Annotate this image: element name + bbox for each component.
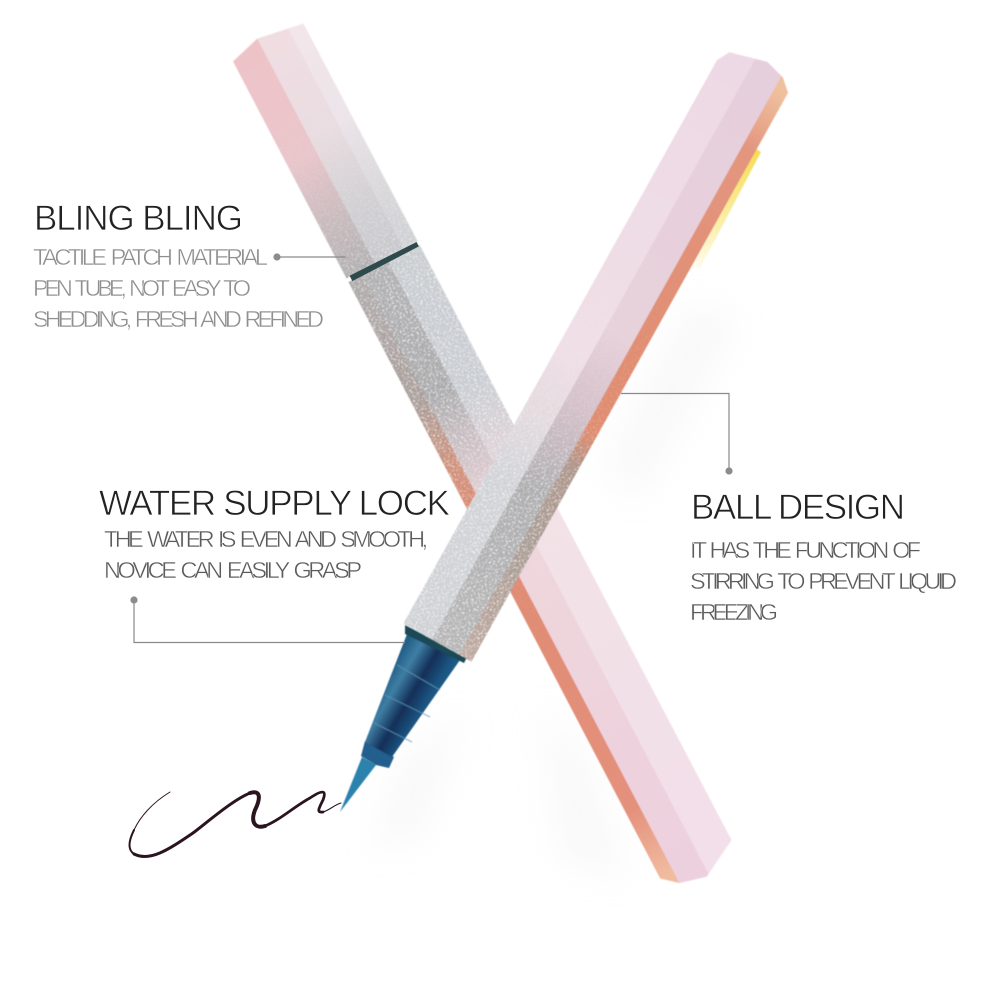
leader line [273,253,346,261]
front pen body [404,52,788,662]
heading: WATER SUPPLY LOCK [99,484,450,523]
description [33,244,324,332]
leader line [621,394,733,475]
description: PEN TUBE, NOT EASY TO [33,275,251,301]
description: IT HAS THE FUNCTION OF [690,537,921,563]
callout: ball design [621,394,957,625]
ink squiggle [130,792,341,857]
description: STIRRING TO PREVENT LIQUID [690,568,957,594]
description: THE WATER IS EVEN AND SMOOTH, [104,526,428,552]
description [104,526,428,583]
pen tip [340,625,468,812]
heading: BLING BLING [34,199,243,238]
ring groove [350,241,419,281]
heading: BALL DESIGN [691,488,905,527]
back pen body [232,24,732,884]
upper pen facets [225,12,745,903]
tip cone [365,634,460,757]
callout: water supply lock [99,484,450,642]
front pen facets [402,35,800,662]
description: FREEZING [690,599,778,625]
callout: bling bling [33,199,346,332]
description [690,537,957,625]
yellow edge sliver [688,145,761,270]
description: SHEDDING, FRESH AND REFINED [33,306,324,332]
glitter on back pen [312,194,513,508]
description: NOVICE CAN EASILY GRASP [104,557,362,583]
tip lower ring [361,741,394,768]
tip ridges [374,665,440,742]
description: TACTILE PATCH MATERIAL [33,244,268,270]
glitter on front pen [404,337,646,661]
pen: back pen, top left to bottom right [232,24,732,884]
tip needle [340,757,376,812]
pen: front pen, top right to bottom left [404,52,788,662]
tip collar [405,625,468,663]
soft shadows [370,300,740,880]
leader line [130,596,405,642]
